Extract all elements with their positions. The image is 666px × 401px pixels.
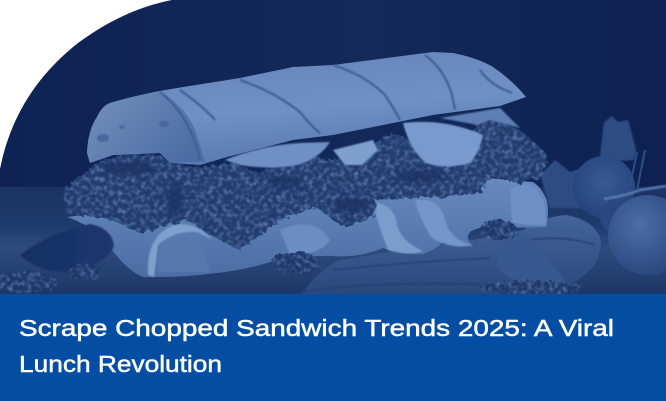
upper bun — [87, 52, 526, 165]
hero photo: duotone sandwich — [0, 0, 666, 296]
dark backdrop — [0, 0, 666, 190]
ground meat filling — [63, 117, 547, 250]
title band — [0, 294, 666, 401]
left pepper — [20, 224, 114, 272]
lettuce — [540, 116, 636, 208]
bun pores — [97, 120, 169, 142]
bread hollow and cheese arch — [148, 224, 212, 277]
tomatoes — [573, 150, 666, 275]
bun cut end — [87, 92, 205, 163]
wooden table — [0, 187, 666, 296]
cheese drips — [280, 184, 546, 255]
cutting board — [300, 215, 601, 296]
meat shadow clusters — [104, 161, 444, 218]
title: Lunch Revolution — [19, 351, 222, 377]
title — [19, 315, 614, 377]
title: Scrape Chopped Sandwich Trends 2025: A Viral — [19, 315, 614, 341]
right pepper — [498, 239, 565, 284]
bun creases — [160, 55, 512, 160]
lower bun and melted cheese — [67, 170, 548, 277]
loose meat crumbs — [0, 220, 582, 295]
top cheese layer — [225, 108, 520, 168]
